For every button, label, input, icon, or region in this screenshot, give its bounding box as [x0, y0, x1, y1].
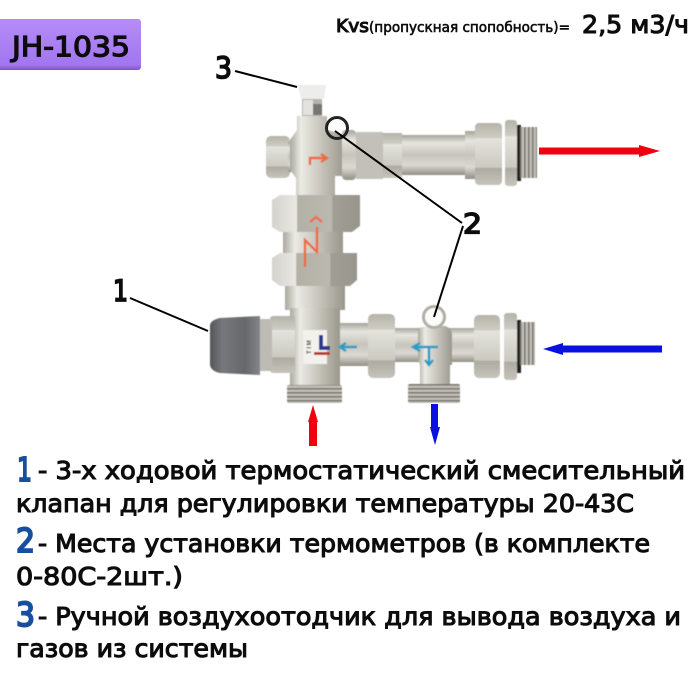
- callout 2: thermometer positions: 2: [463, 207, 482, 240]
- upper manifold: [266, 85, 537, 256]
- description 1: - 3-х ходовой термостатический смесительный: [38, 456, 685, 485]
- description 1: [16, 450, 685, 518]
- arrow: red inlet: [308, 405, 318, 446]
- description 3: газов из системы: [16, 634, 248, 663]
- heading: Kvs capacity: (пропускная спопобность)=: [369, 20, 570, 36]
- description 2: 0-80С-2шт.): [16, 562, 183, 591]
- callout 3: air vent: [215, 51, 297, 87]
- heading: Kvs capacity: 2,5 м3/ч: [582, 10, 689, 39]
- description 2: - Места установки термометров (в комплекте: [38, 529, 650, 558]
- callout 2: thermometer positions: [326, 118, 482, 317]
- heading: Kvs capacity: Kvs: [336, 16, 369, 37]
- lower manifold: T I M: [307, 340, 313, 354]
- description 2: 2: [16, 521, 35, 560]
- callout 1: thermostatic valve: [113, 274, 208, 331]
- arrow: blue outlet: [430, 404, 440, 445]
- description 2: [16, 521, 650, 591]
- arrow: red outlet: [539, 145, 660, 157]
- heading: Kvs capacity: [336, 10, 689, 39]
- lower manifold: [210, 253, 535, 403]
- badge: model JH-1035: JH-1035: [10, 30, 130, 63]
- description 3: 3: [16, 595, 35, 634]
- small flow arrows on body: [305, 154, 438, 365]
- valve assembly photo: [210, 85, 537, 403]
- description 3: [16, 595, 681, 663]
- arrow: blue inlet: [543, 343, 662, 355]
- description 1: 1: [17, 450, 32, 489]
- description 1: клапан для регулировки температуры 20-43С: [16, 489, 634, 518]
- callout 1: thermostatic valve: 1: [113, 274, 128, 308]
- description 3: - Ручной воздухоотодчик для вывода воздуха и: [38, 602, 681, 631]
- badge: model JH-1035: [0, 19, 141, 70]
- callout 3: air vent: 3: [215, 51, 232, 85]
